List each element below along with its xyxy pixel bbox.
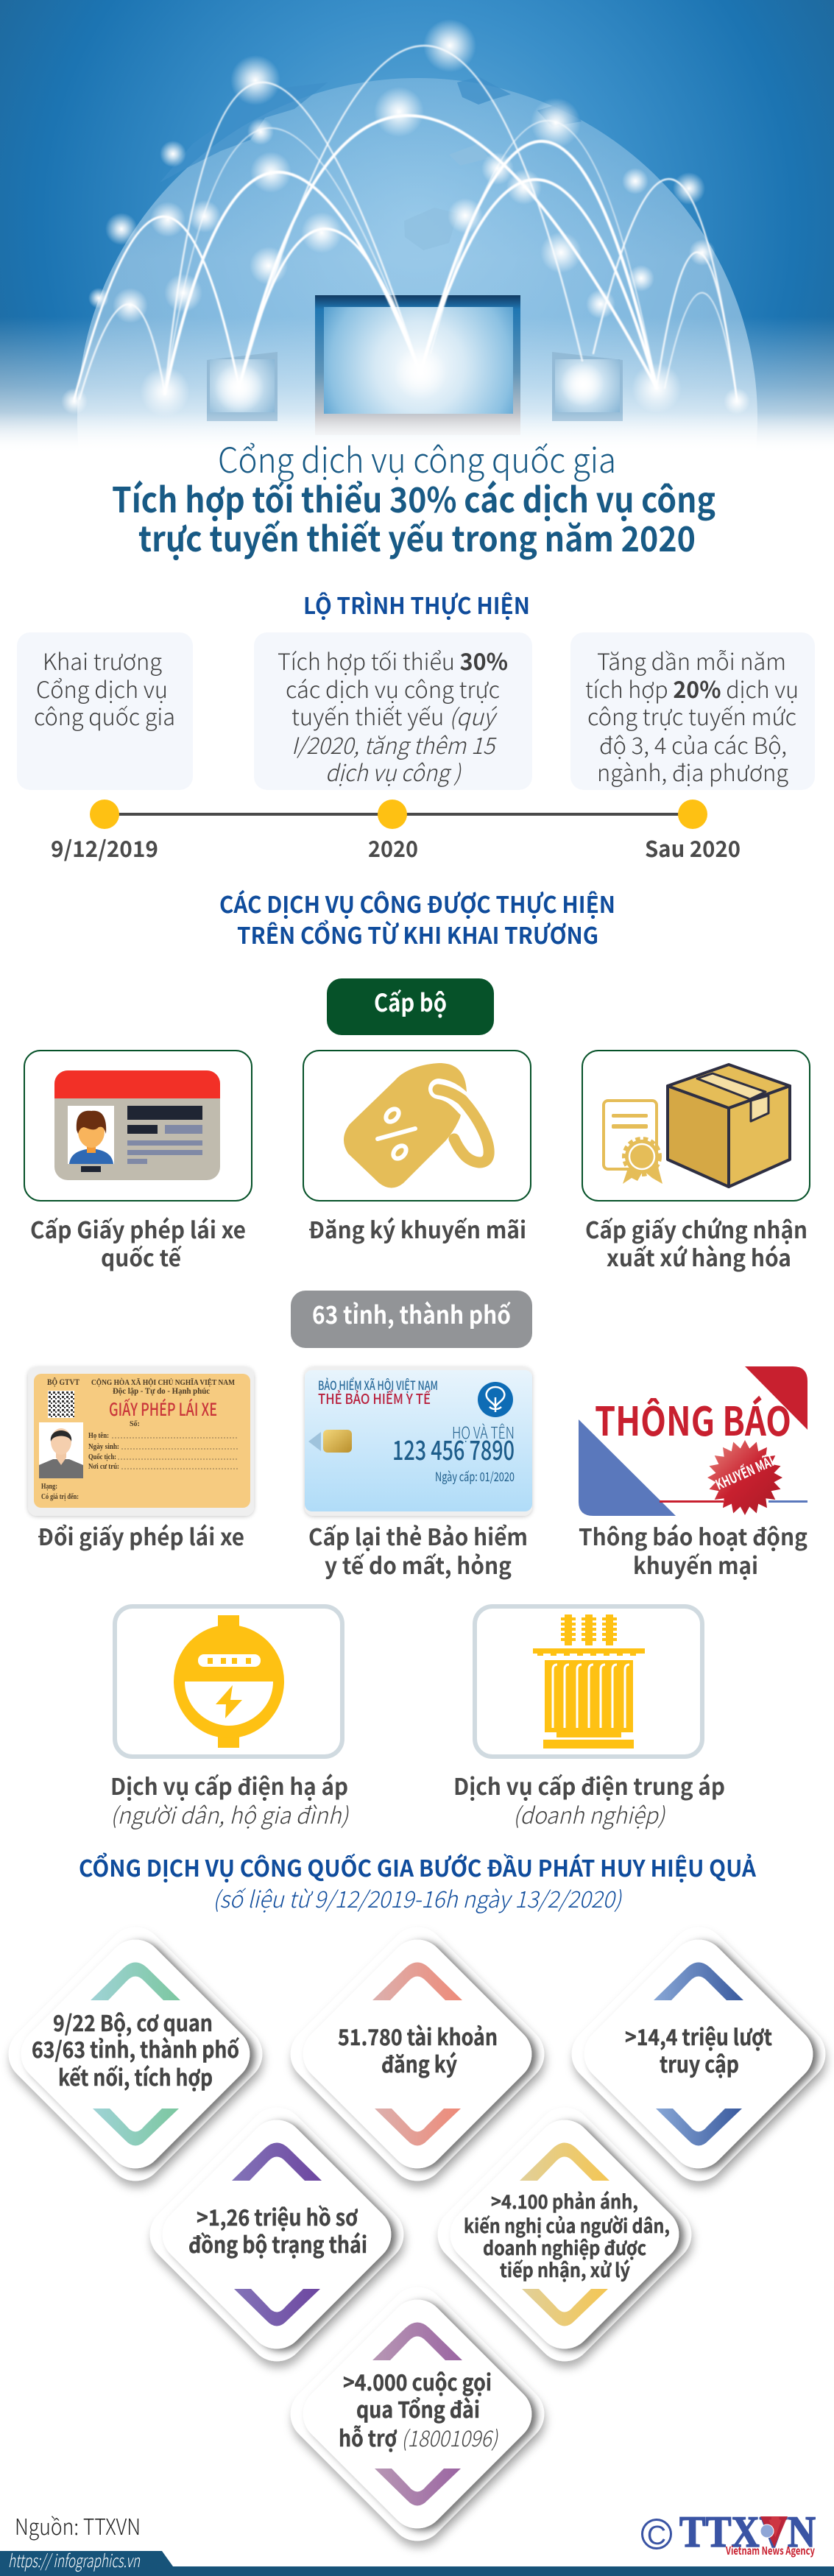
- stat diamond 5: [426, 2096, 703, 2373]
- icon: id card: [54, 1070, 220, 1180]
- icon: health insurance card: [305, 1367, 532, 1516]
- source: Nguồn: TTXVN: [15, 2509, 141, 2541]
- stat diamond 5: >4.100 phản ánh,: [491, 2187, 638, 2215]
- stat diamond 4: [138, 2096, 415, 2373]
- icon: notice banner: [579, 1366, 808, 1516]
- timeline: Sau 2020: [645, 831, 741, 864]
- monitors: [207, 295, 623, 435]
- title: trực tuyến thiết yếu trong năm 2020: [138, 511, 696, 562]
- panel: roadmap card 1: Khai trương: [43, 643, 162, 677]
- title: [112, 432, 715, 562]
- stat diamond 1: [0, 1916, 274, 2192]
- stat diamond 2: 51.780 tài khoản: [338, 2019, 498, 2052]
- footer bar with url: [0, 2547, 834, 2576]
- panel: roadmap card 2: dịch vụ công ): [325, 755, 462, 788]
- label: [585, 1212, 808, 1273]
- icon: price tag: [344, 1063, 489, 1188]
- icon: notice banner: KHUYẾN MÃI: [712, 1451, 777, 1494]
- label: (người dân, hộ gia đình): [110, 1797, 349, 1830]
- label: Đổi giấy phép lái xe: [38, 1519, 244, 1552]
- label: quốc tế: [101, 1240, 182, 1273]
- stat diamond 4: >1,26 triệu hồ sơ: [197, 2200, 358, 2232]
- stat diamond 3: >14,4 triệu lượt: [625, 2019, 772, 2052]
- icon: driving licence: Có giá trị đến:: [41, 1493, 79, 1501]
- panel: roadmap card 2: I/2020, tăng thêm 15: [291, 727, 497, 761]
- icon: certificate: [604, 1101, 662, 1184]
- label: [579, 1519, 808, 1581]
- stat diamond 5: kiến nghị của người dân,: [464, 2212, 670, 2239]
- stat diamond 1: 63/63 tỉnh, thành phố: [32, 2032, 239, 2064]
- label: (doanh nghiệp): [513, 1797, 665, 1830]
- panel: roadmap card 2: các dịch vụ công trực: [286, 671, 500, 705]
- stat diamond 6: hỗ trợ (18001096): [339, 2421, 498, 2453]
- heading: các dịch vụ công: [219, 886, 615, 950]
- panel: roadmap card 1: [17, 632, 193, 790]
- icon: driving licence: Độc lập - Tự do - Hạnh phúc: [113, 1386, 211, 1396]
- title: Cổng dịch vụ công quốc gia: [218, 432, 616, 483]
- stat diamond 5: tiếp nhận, xử lý: [500, 2256, 630, 2283]
- button: cấp bộ: [327, 978, 494, 1035]
- panel: roadmap card 3: ngành, địa phương: [597, 755, 788, 788]
- stat diamond 2: đăng ký: [381, 2047, 457, 2079]
- label: y tế do mất, hỏng: [325, 1548, 512, 1581]
- panel: cấp giấy phép lái xe quốc tế: [24, 1051, 252, 1273]
- icon: transformer: [533, 1615, 645, 1748]
- icon: driving licence: GIẤY PHÉP LÁI XE: [109, 1395, 217, 1421]
- panel: roadmap card 1: Cổng dịch vụ: [36, 671, 168, 705]
- icon: driving licence: Nơi cư trú:: [88, 1463, 119, 1471]
- icon: health insurance card: THẺ BẢO HIỂM Y TẾ: [318, 1388, 431, 1408]
- label: xuất xứ hàng hóa: [607, 1240, 791, 1273]
- icon: health insurance card: 123 456 7890: [392, 1430, 515, 1468]
- label: Dịch vụ cấp điện hạ áp: [110, 1768, 348, 1802]
- hero illustration: network globe and monitors: [0, 0, 834, 440]
- panel: cấp giấy chứng nhận: [582, 1051, 810, 1273]
- panel: roadmap card 2: Tích hợp tối thiểu 30%: [278, 643, 508, 677]
- label: [308, 1519, 528, 1581]
- panel: dịch vụ cấp điện trung áp: [453, 1606, 725, 1830]
- label: Dịch vụ cấp điện trung áp: [453, 1768, 725, 1802]
- panel: thông báo khuyến mại: [579, 1366, 808, 1581]
- stat diamond 1: 9/22 Bộ, cơ quan: [53, 2005, 213, 2038]
- panel: roadmap card 2: [254, 632, 532, 790]
- icon: health insurance card: Ngày cấp: 01/2020: [435, 1467, 515, 1485]
- icon: driving licence: [28, 1367, 254, 1516]
- label: Thông báo hoạt động: [579, 1519, 808, 1552]
- heading: lộ trình: LỘ TRÌNH THỰC HIỆN: [303, 587, 530, 621]
- icon: box: [668, 1065, 790, 1187]
- label: [453, 1768, 725, 1830]
- stat diamond 6: qua Tổng đài: [356, 2392, 480, 2424]
- icon: driving licence: Hạng:: [41, 1483, 57, 1491]
- glowing nodes: [61, 19, 750, 417]
- icon: driving licence: BỘ GTVT: [47, 1377, 79, 1387]
- icon: driving licence: Ngày sinh:: [88, 1443, 119, 1451]
- network arcs: [74, 46, 737, 399]
- icon: driving licence: CỘNG HÒA XÃ HỘI CHỦ NGHĨA VIỆT NAM: [91, 1377, 236, 1387]
- logo: TTXVN: C: [647, 2520, 666, 2550]
- timeline: [51, 800, 741, 864]
- icon: electric meter: [174, 1615, 284, 1748]
- icon: driving licence: Họ tên:: [88, 1432, 109, 1440]
- stat diamond 3: [560, 1916, 834, 2192]
- stat diamond 1: kết nối, tích hợp: [58, 2060, 213, 2092]
- icon: driving licence: Số:: [130, 1420, 140, 1428]
- stat diamond 4: đồng bộ trạng thái: [188, 2227, 367, 2259]
- label: Cấp giấy chứng nhận: [585, 1212, 808, 1245]
- button: 63 tỉnh, thành phố: [291, 1291, 532, 1348]
- stat diamond 3: truy cập: [660, 2047, 739, 2079]
- title: Tích hợp tối thiểu 30% các dịch vụ công: [112, 472, 715, 523]
- heading: hiệu quả: CỔNG DỊCH VỤ CÔNG QUỐC GIA BƯỚC ĐẦU PHÁT HUY HIỆU QUẢ: [79, 1850, 756, 1883]
- panel: roadmap card 3: [570, 632, 815, 790]
- label: Đăng ký khuyến mãi: [308, 1212, 526, 1245]
- panel: roadmap card 3: công trực tuyến mức: [587, 699, 796, 732]
- footer bar with url: https:// infographics.vn: [8, 2547, 141, 2572]
- panel: roadmap card 2: tuyến thiết yếu (quý: [291, 699, 498, 732]
- stat diamond 5: doanh nghiệp được: [483, 2234, 646, 2261]
- label: [30, 1212, 246, 1273]
- panel: dịch vụ cấp điện hạ áp: [110, 1606, 349, 1830]
- panel: roadmap card 3: Tăng dần mỗi năm: [597, 643, 786, 677]
- stat diamond 2: [279, 1916, 556, 2192]
- panel: roadmap card 3: độ 3, 4 của các Bộ,: [599, 727, 787, 761]
- timeline: 9/12/2019: [51, 831, 158, 864]
- label: Cấp Giấy phép lái xe: [30, 1212, 246, 1245]
- stat diamond 6: >4.000 cuộc gọi: [343, 2365, 492, 2397]
- heading: các dịch vụ công: TRÊN CỔNG TỪ KHI KHAI TRƯƠNG: [237, 917, 598, 950]
- panel: đăng ký khuyến mãi: [303, 1051, 531, 1245]
- stat diamond 6: [279, 2276, 556, 2552]
- icon: notice banner: THÔNG BÁO: [595, 1389, 791, 1447]
- icon: health insurance card: HỌ VÀ TÊN: [452, 1420, 515, 1444]
- panel: đổi giấy phép lái xe: [28, 1367, 254, 1552]
- heading: hiệu quả: (số liệu từ 9/12/2019-16h ngày 13/2/2020): [213, 1881, 622, 1914]
- label: [110, 1768, 349, 1830]
- button: cấp bộ: Cấp bộ: [374, 984, 447, 1019]
- icon: driving licence: Quốc tịch:: [88, 1453, 116, 1461]
- logo: TTXVN: [642, 2508, 816, 2558]
- globe: [77, 78, 757, 431]
- panel: cấp lại thẻ bảo hiểm y tế: [305, 1367, 532, 1581]
- button: 63 tỉnh, thành phố: 63 tỉnh, thành phố: [312, 1296, 511, 1331]
- panel: roadmap card 1: công quốc gia: [34, 699, 175, 732]
- heading: hiệu quả: [79, 1850, 756, 1914]
- heading: các dịch vụ công: CÁC DỊCH VỤ CÔNG ĐƯỢC THỰC HIỆN: [219, 886, 615, 920]
- panel: roadmap card 3: tích hợp 20% dịch vụ: [585, 671, 799, 705]
- logo: TTXVN: TTXVN: [679, 2508, 816, 2556]
- label: Cấp lại thẻ Bảo hiểm: [308, 1519, 528, 1552]
- icon: health insurance card: BẢO HIỂM XÃ HỘI VIỆT NAM: [318, 1375, 438, 1394]
- timeline: 2020: [368, 831, 418, 864]
- label: khuyến mại: [633, 1548, 758, 1581]
